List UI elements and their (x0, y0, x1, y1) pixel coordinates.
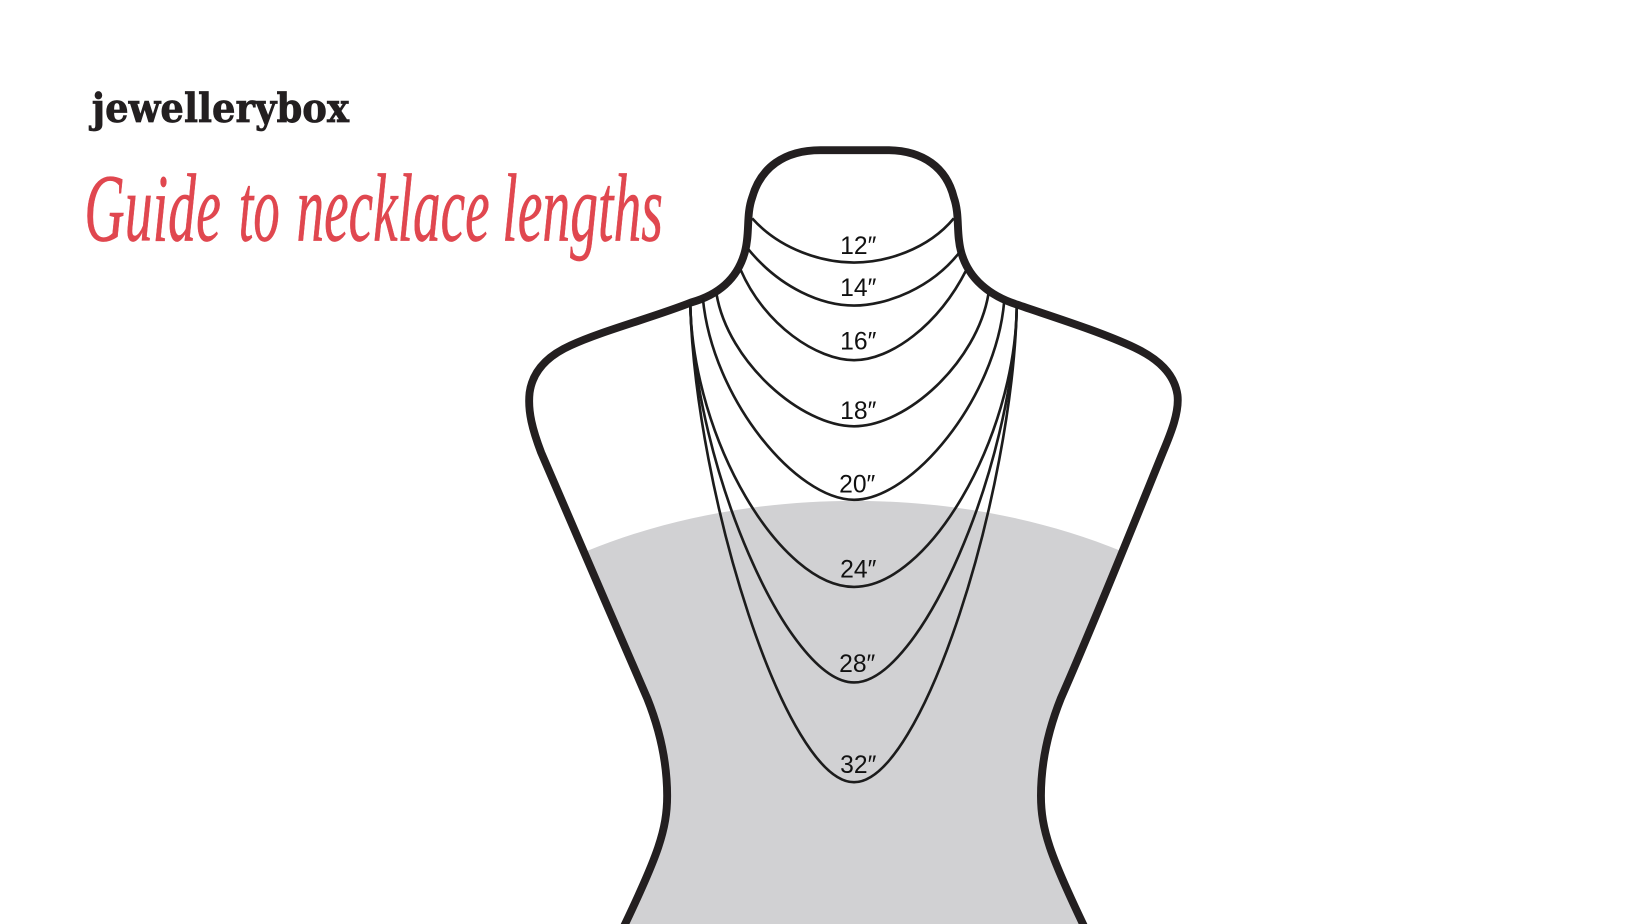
label 16: 16″ (840, 329, 877, 356)
title: guide to necklace lengths: lengths (502, 154, 663, 261)
grey torso fill (586, 501, 1122, 924)
necklaces (690, 218, 1017, 782)
label 24: 24″ (840, 557, 877, 584)
mannequin outline (529, 150, 1178, 924)
label 14: 14″ (840, 275, 877, 302)
necklace 16 inch (741, 270, 966, 360)
label 18: 18″ (840, 398, 877, 425)
logo: jewellerybox: jewellerybox (89, 86, 350, 132)
necklace 18 inch (716, 294, 988, 426)
label 28: 28″ (839, 651, 876, 678)
title: guide to necklace lengths: Guide (84, 154, 221, 261)
label 32: 32″ (840, 752, 877, 779)
necklace 14 inch (748, 249, 962, 306)
necklace 12 inch (752, 218, 954, 262)
title: guide to necklace lengths (84, 154, 663, 261)
label 12: 12″ (840, 233, 877, 260)
length labels (839, 233, 877, 779)
necklace 20 inch (703, 298, 1004, 500)
title: guide to necklace lengths: necklace (297, 154, 490, 261)
mannequin figure (529, 150, 1178, 924)
necklace 24 inch (690, 304, 1017, 587)
necklace 32 inch (690, 304, 1017, 782)
label 20: 20″ (839, 471, 876, 498)
necklace 28 inch (690, 304, 1017, 682)
title: guide to necklace lengths: to (239, 154, 280, 261)
